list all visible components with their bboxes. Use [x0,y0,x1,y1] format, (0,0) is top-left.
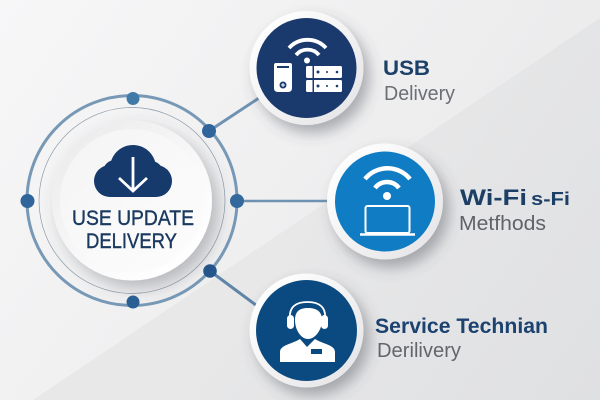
label: Wi-Fi: s-Fi [531,189,570,209]
hub title: DELIVERY [86,230,177,253]
icon: technician with headset [280,302,335,362]
node: Wi-Fi [327,144,443,260]
label: Wi-Fi: Wi-Fi [460,185,527,210]
label: USB: Delivery [384,83,455,105]
node: USB [250,11,364,125]
hub title: USE UPDATE [72,207,194,230]
connector: hub to technician [210,271,264,311]
label: service technician [375,315,548,362]
label: USB [383,57,455,105]
icon: cloud download [94,145,172,197]
hub title [72,207,194,253]
connector: hub to USB [209,96,262,131]
central hub disc [52,120,212,280]
label: service technician: Derilivery [377,340,461,362]
label: USB: USB [383,57,430,80]
orbit nodes [20,92,244,308]
label: Wi-Fi [459,185,570,235]
connector: hub to Wi-Fi [237,200,338,202]
icon: wifi, usb stick and server [274,40,342,93]
node: service technician [250,274,364,388]
icon: wifi and laptop [360,168,415,234]
label: Wi-Fi: Metfhods [459,213,546,235]
label: service technician: Service Technian [375,315,548,338]
hub orbit rings [27,96,237,306]
